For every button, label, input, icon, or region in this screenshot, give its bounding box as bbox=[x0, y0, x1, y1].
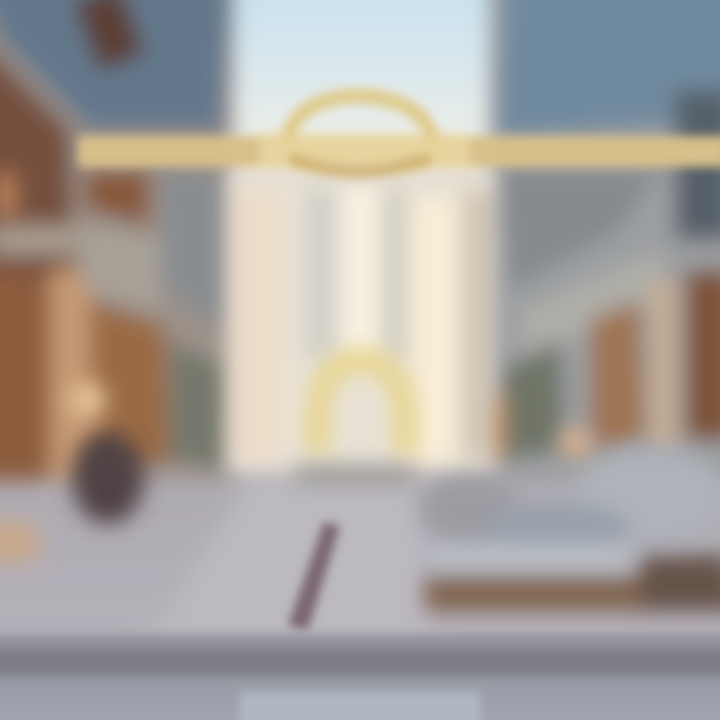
left building bbox=[0, 0, 232, 520]
sky bbox=[215, 0, 505, 180]
lower golden arch bbox=[318, 360, 405, 455]
bottom band bbox=[0, 635, 720, 720]
seating on the right bbox=[420, 427, 720, 611]
right building bbox=[480, 0, 720, 500]
figures on the left bbox=[0, 169, 144, 564]
golden band bbox=[78, 134, 720, 168]
floor stripe bbox=[288, 522, 340, 630]
floor bbox=[0, 465, 720, 655]
upper golden arch bbox=[287, 96, 433, 172]
central pale columns bbox=[228, 170, 493, 475]
